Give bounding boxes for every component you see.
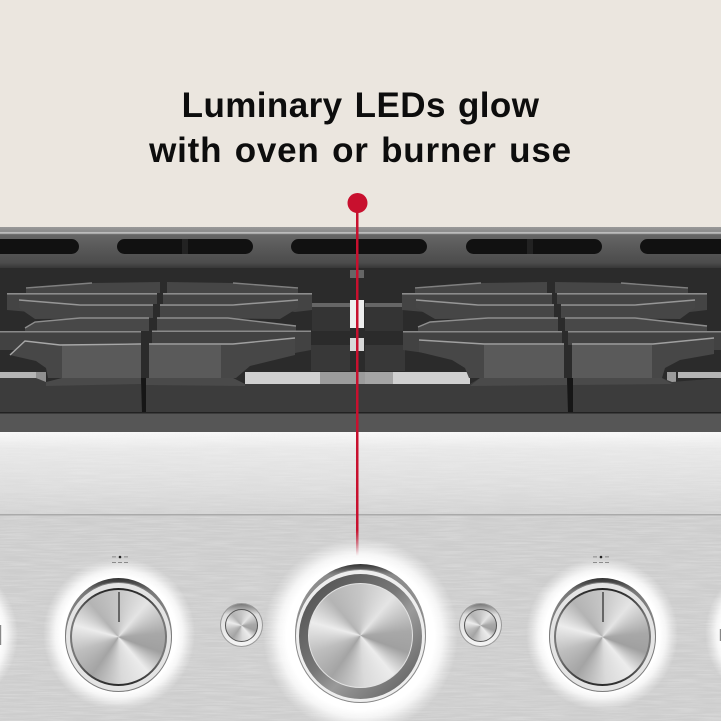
stainless control panel [0,516,721,721]
callout line and dot [348,193,368,556]
glow: center knob [263,538,458,721]
small left button [220,603,263,647]
glow: right knob [526,558,678,710]
center knob [295,564,426,703]
title: Luminary LEDs glow [182,86,539,125]
stainless front lip [0,432,721,516]
back rail with slots [0,227,721,269]
setting marks left [112,556,128,563]
left burner grate [0,282,312,378]
right knob [549,578,656,692]
glow: far left knob [0,562,18,708]
glow: far right knob [705,562,721,704]
cooktop well [0,268,721,384]
edge knob slivers [0,625,721,645]
setting marks right [593,556,609,563]
right burner grate [402,282,721,378]
small right button [459,603,502,647]
grate base and front ledge [0,378,721,432]
glow: left knob [43,558,195,710]
title: with oven or burner use [149,131,572,170]
left knob [65,578,172,692]
title [149,86,572,170]
